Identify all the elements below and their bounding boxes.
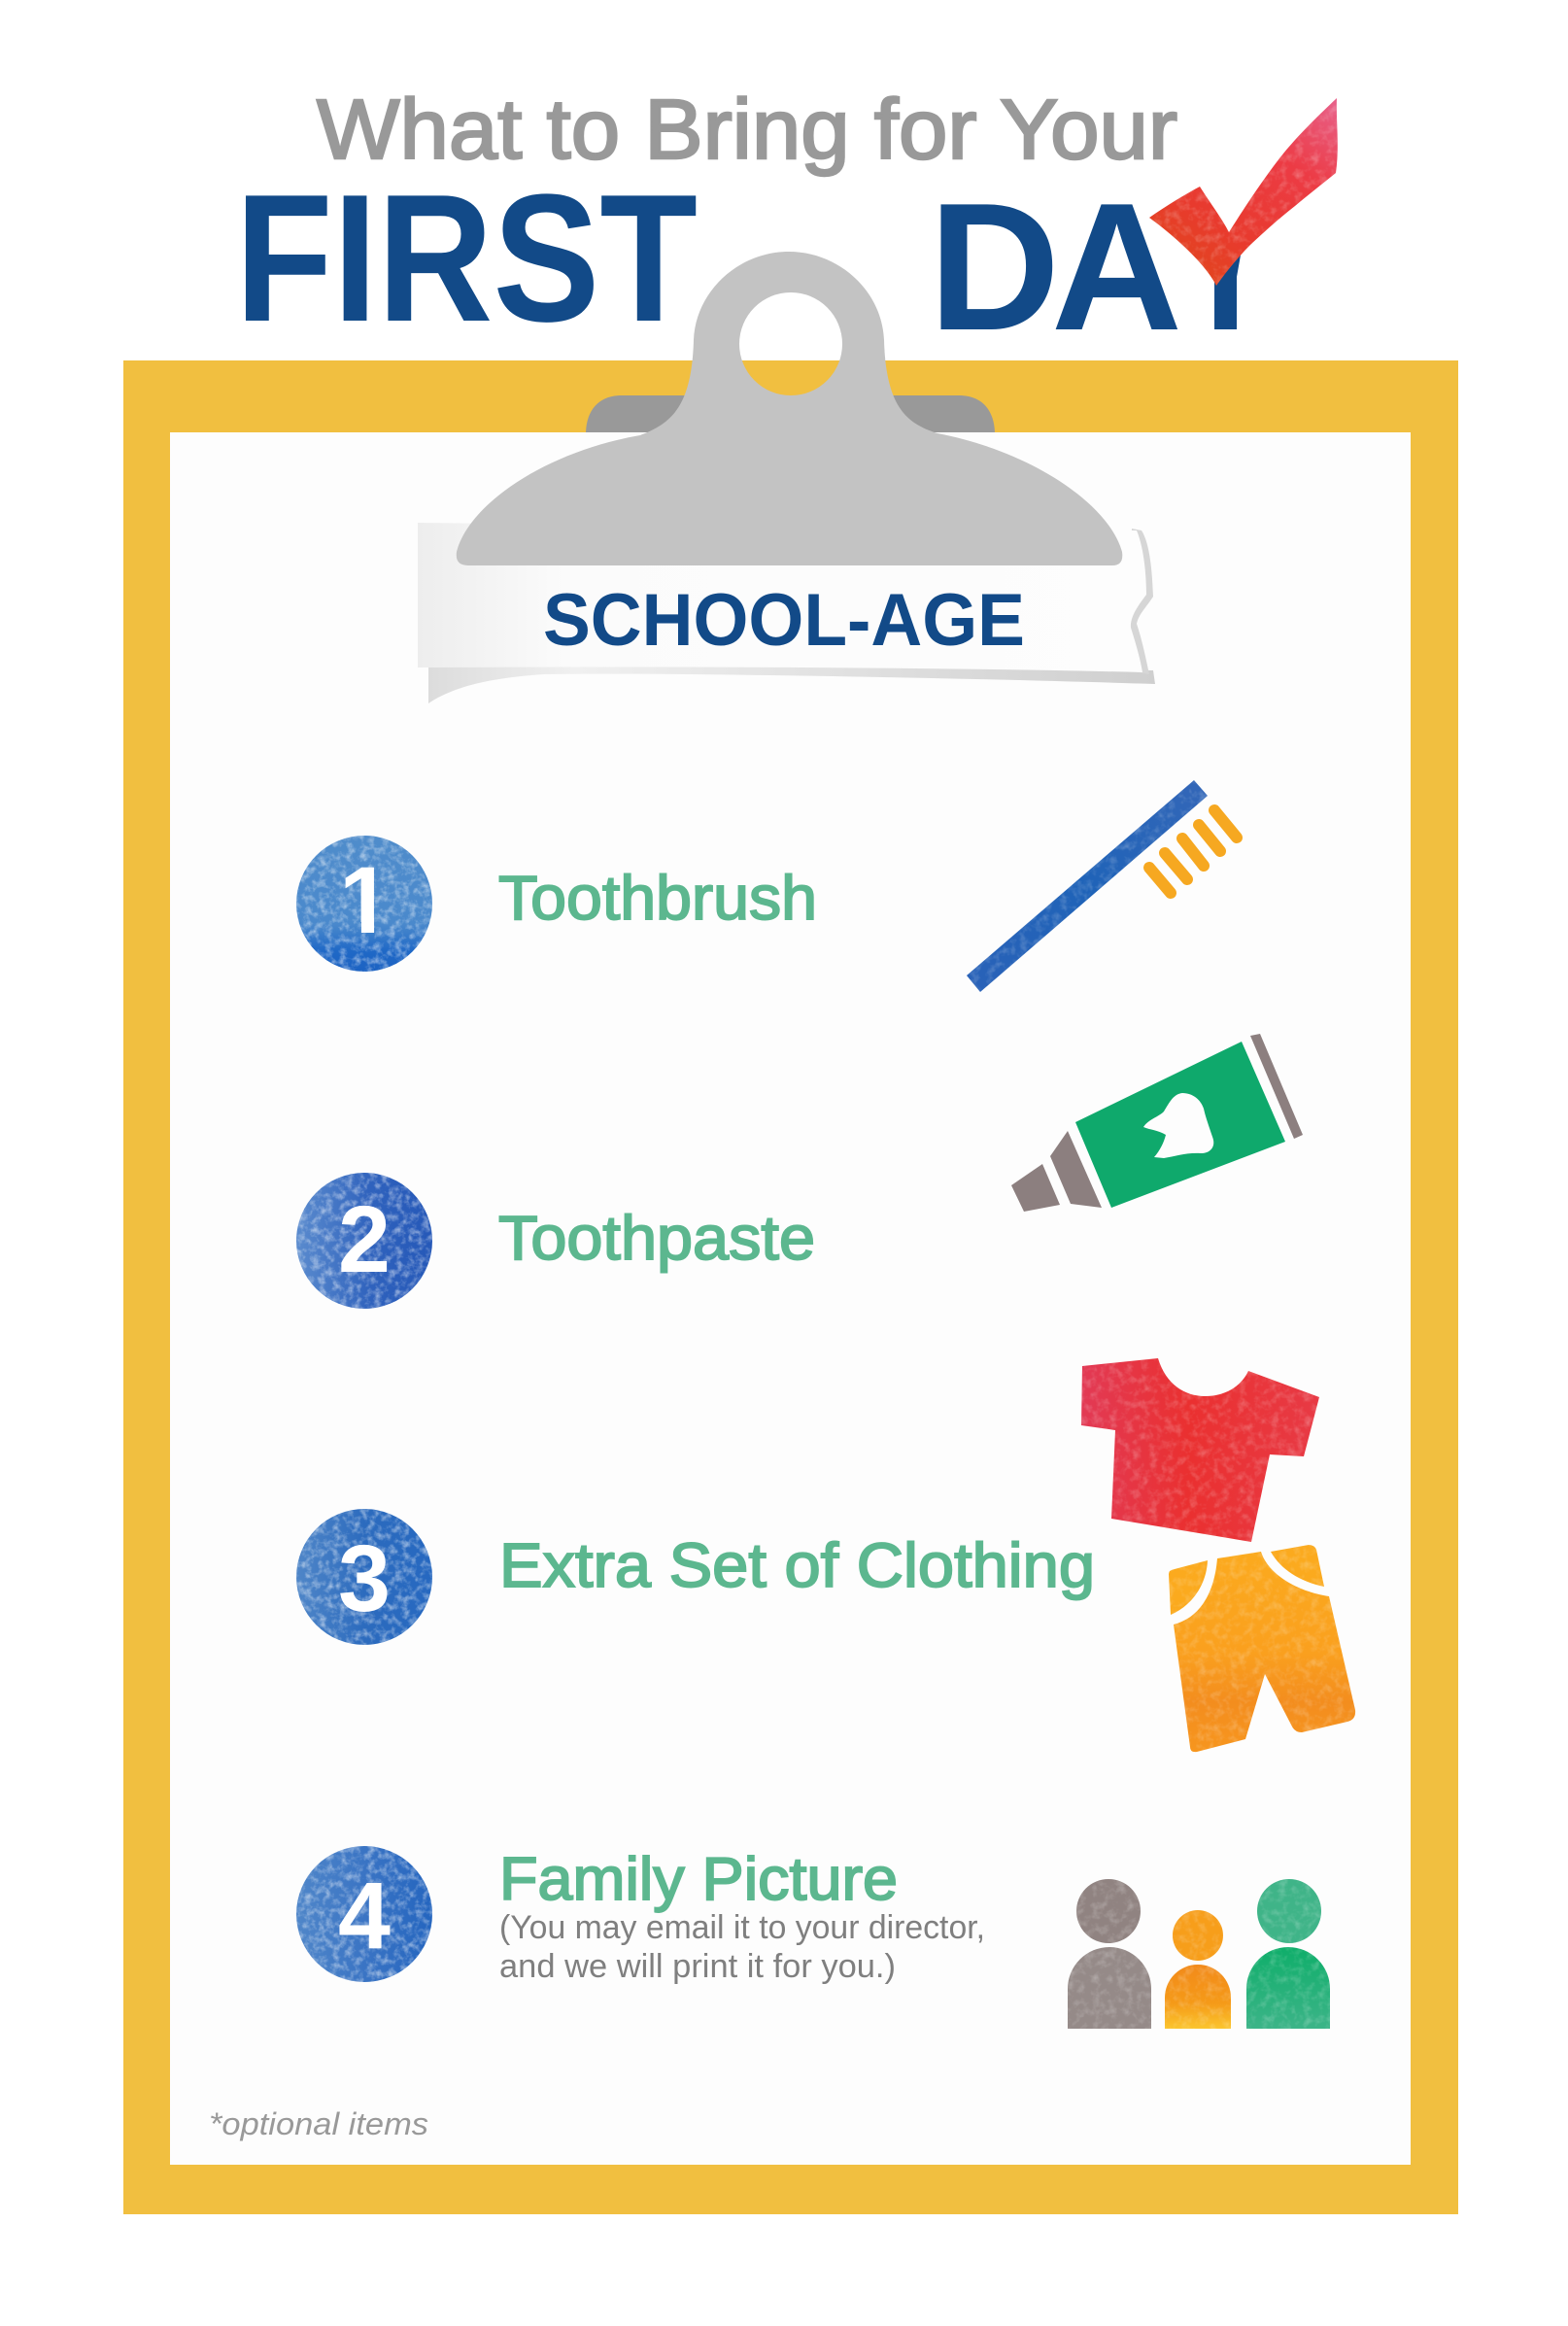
icon: family of three [1068, 1879, 1330, 2029]
icon: orange shorts [1169, 1545, 1355, 1752]
label: Toothpaste: Toothpaste [498, 1203, 815, 1273]
label: Family Picture: Family Picture [499, 1846, 898, 1913]
icon: toothpaste tube [1011, 1034, 1303, 1212]
clip: silver clamp [457, 252, 1122, 565]
clip: back plate [586, 395, 995, 432]
label: Toothbrush: Toothbrush [498, 863, 817, 933]
note: email line one: (You may email it to your director, [499, 1909, 985, 1946]
banner torn edge [1127, 529, 1153, 674]
number badge 1: 1 [339, 847, 392, 953]
title line: What to Bring for Your: What to Bring for Your [317, 83, 1177, 177]
banner heading: SCHOOL-AGE: SCHOOL-AGE [543, 579, 1025, 662]
number badge 3 [296, 1509, 432, 1645]
banner: torn paper label [418, 523, 1155, 703]
banner face [418, 523, 1146, 672]
title word: FIRST: FIRST [235, 156, 698, 359]
item 4 [296, 1846, 1330, 2029]
clipboard board [123, 360, 1458, 2214]
number badge 4: 4 [338, 1863, 391, 1968]
note: email line two: and we will print it for you.) [499, 1948, 896, 1985]
number badge 2 [296, 1173, 432, 1309]
footnote: optional items: *optional items [209, 2106, 428, 2141]
icon: toothbrush [967, 780, 1237, 992]
number badge 2: 2 [338, 1186, 391, 1292]
item 1 [296, 780, 1237, 992]
infographic [123, 95, 1458, 2214]
item 3 [296, 1358, 1355, 1752]
icon: red check mark [1149, 98, 1338, 286]
icon: red t-shirt [1081, 1358, 1319, 1542]
item 2 [296, 1034, 1303, 1309]
number badge 4 [296, 1846, 432, 1982]
number badge 3: 3 [338, 1525, 391, 1631]
label: Extra Set of Clothing: Extra Set of Clothing [499, 1530, 1095, 1600]
banner tail [428, 661, 1155, 703]
number badge 1 [296, 836, 432, 972]
title word: DAY: DAY [929, 165, 1288, 368]
